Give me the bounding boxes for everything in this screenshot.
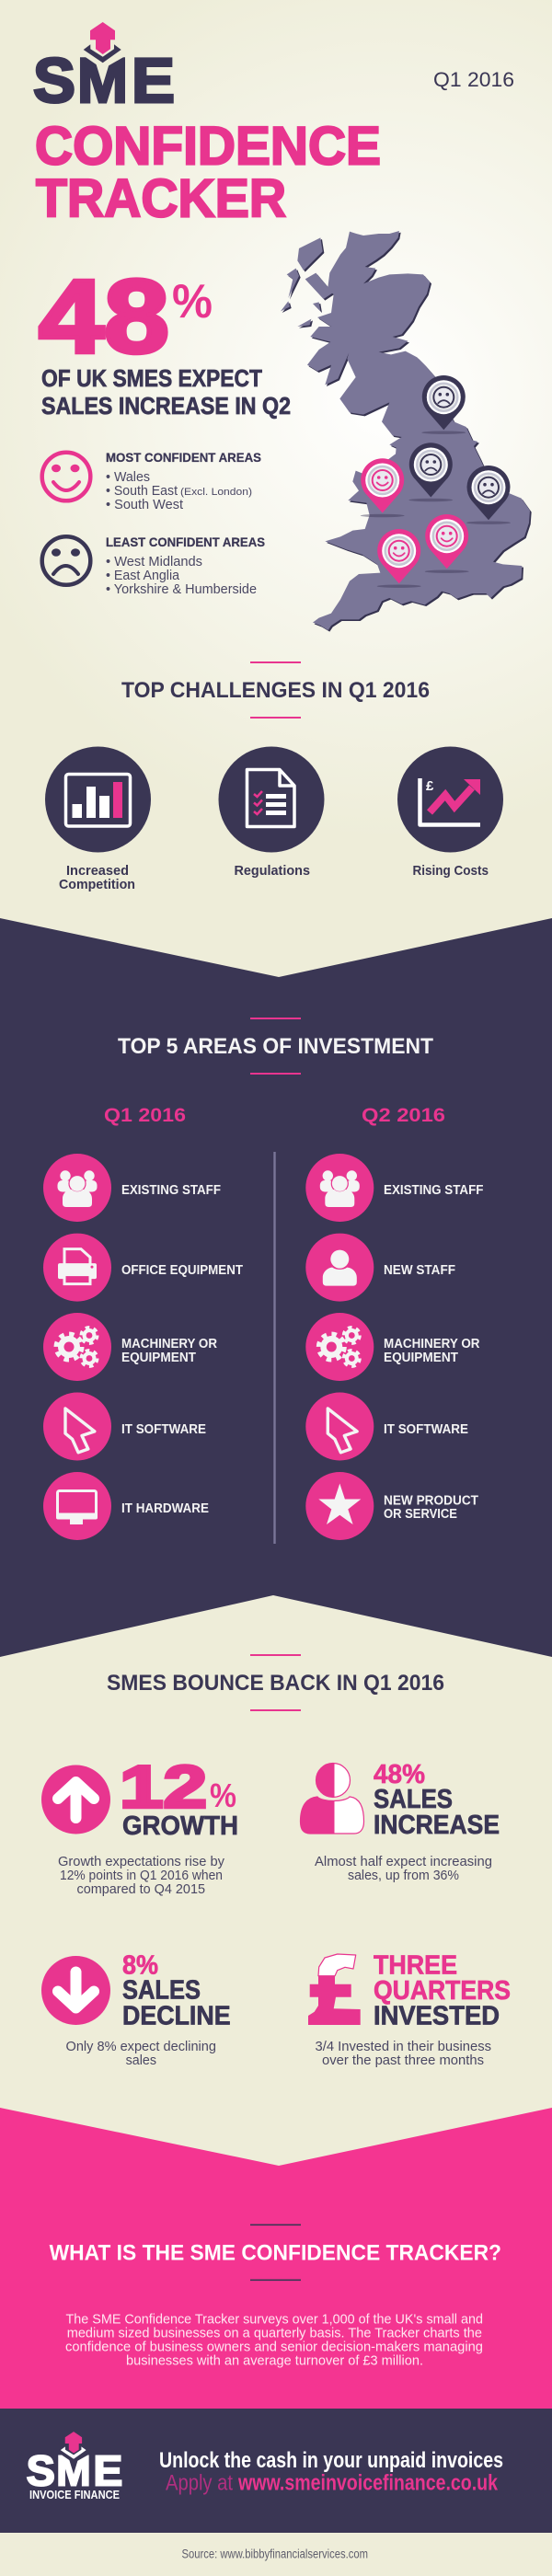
pin: Wales (most confident) bbox=[361, 458, 405, 517]
icon: up arrow bbox=[41, 1765, 110, 1834]
stat: three quarters invested: THREE bbox=[374, 1951, 457, 1981]
panel: footer bbox=[0, 2409, 552, 2533]
item: new product or service: NEW PRODUCT bbox=[384, 1494, 478, 1509]
heading: top 5 areas of investment: TOP 5 AREAS OF INVESTMENT bbox=[118, 1034, 433, 1059]
item: new product or service: OR SERVICE bbox=[384, 1507, 457, 1522]
pin: South West (most confident) bbox=[377, 529, 421, 588]
stat: 12% growth: 12 bbox=[120, 1754, 207, 1820]
challenge: increased competition bbox=[45, 747, 151, 892]
icon: down arrow bbox=[41, 1956, 110, 2025]
challenge: rising costs bbox=[397, 747, 503, 879]
item: existing staff bbox=[43, 1154, 221, 1222]
item: new staff: NEW STAFF bbox=[384, 1263, 455, 1278]
title: TRACKER bbox=[36, 169, 286, 228]
stat: three quarters invested: QUARTERS bbox=[374, 1976, 511, 2006]
tracker description bbox=[65, 2312, 483, 2369]
headline statistic 48%: 48 bbox=[39, 259, 169, 374]
heading: what is the SME confidence tracker: WHAT IS THE SME CONFIDENCE TRACKER? bbox=[50, 2241, 501, 2266]
heading: SMEs bounce back: SMES BOUNCE BACK IN Q1 2016 bbox=[107, 1671, 444, 1696]
most confident areas: • Wales bbox=[106, 470, 150, 485]
SME logo bbox=[33, 22, 175, 116]
pin: Yorkshire and Humberside (least confident) bbox=[408, 443, 453, 501]
item: office equipment bbox=[43, 1234, 243, 1302]
item: existing staff: EXISTING STAFF bbox=[121, 1183, 221, 1198]
stat: 12% growth: GROWTH bbox=[122, 1811, 238, 1841]
least confident areas: LEAST CONFIDENT AREAS bbox=[106, 535, 265, 549]
item: machinery or equipment: MACHINERY OR bbox=[384, 1337, 480, 1351]
most confident areas: MOST CONFIDENT AREAS bbox=[106, 450, 261, 465]
stat: 48% sales increase: INCREASE bbox=[374, 1811, 500, 1840]
stat: 8% sales decline: 8% bbox=[122, 1951, 158, 1981]
date label: Q1 2016 bbox=[433, 68, 514, 91]
Q1 list bbox=[43, 1154, 243, 1540]
item: new staff bbox=[305, 1234, 455, 1302]
Q2 list bbox=[305, 1154, 484, 1540]
item: machinery or equipment: EQUIPMENT bbox=[121, 1351, 196, 1365]
stat: 8% sales decline: Only 8% expect declining bbox=[66, 2039, 216, 2054]
item: IT software: IT SOFTWARE bbox=[121, 1422, 206, 1437]
item: IT software: IT SOFTWARE bbox=[384, 1422, 468, 1437]
stat: three quarters invested: over the past three months bbox=[322, 2053, 484, 2068]
header background glow bbox=[0, 0, 552, 980]
stat: three quarters invested bbox=[308, 1951, 511, 2068]
tracker description: businesses with an average turnover of £3 million. bbox=[126, 2353, 423, 2369]
footer logo bbox=[27, 2432, 122, 2501]
least confident areas: • East Anglia bbox=[106, 569, 180, 583]
item: new product or service bbox=[305, 1472, 478, 1540]
stat: 12% growth: 12% points in Q1 2016 when bbox=[60, 1868, 223, 1883]
item: existing staff: EXISTING STAFF bbox=[384, 1183, 484, 1198]
stat: 12% growth: Growth expectations rise by bbox=[58, 1854, 224, 1869]
UK map with pins bbox=[281, 231, 532, 632]
stat: 48% sales increase bbox=[300, 1760, 500, 1883]
stat: 48% sales increase: SALES bbox=[374, 1785, 453, 1814]
least confident areas bbox=[106, 535, 265, 597]
footer logo: INVOICE FINANCE bbox=[29, 2489, 120, 2501]
stat: 48% sales increase: 48% bbox=[374, 1760, 425, 1789]
source line: Source: www.bibbyfinancialservices.com bbox=[182, 2547, 368, 2561]
panel: what is the tracker background bbox=[0, 2108, 552, 2409]
SME logo: E bbox=[132, 45, 175, 116]
title bbox=[35, 116, 381, 228]
column heading: Q1 2016: Q1 2016 bbox=[104, 1105, 186, 1126]
headline statistic 48% bbox=[39, 259, 213, 374]
footer call to action: Apply at bbox=[166, 2471, 233, 2496]
least confident areas: • Yorkshire & Humberside bbox=[106, 582, 257, 597]
panel: investment background bbox=[0, 918, 552, 1657]
headline statistic 48%: % bbox=[172, 275, 213, 328]
SME logo: S bbox=[33, 45, 75, 116]
tracker description: The SME Confidence Tracker surveys over 1,000 of the UK's small and bbox=[66, 2312, 483, 2328]
footer logo: S bbox=[27, 2447, 55, 2494]
most confident areas bbox=[106, 450, 261, 512]
item: IT hardware bbox=[43, 1472, 209, 1540]
stat: 8% sales decline: SALES bbox=[122, 1976, 201, 2006]
icon: pound sign three quarters filled bbox=[308, 1954, 361, 2025]
headline statistic text: OF UK SMES EXPECT bbox=[41, 366, 262, 392]
item: IT software bbox=[305, 1393, 468, 1461]
stat: 12% growth: compared to Q4 2015 bbox=[77, 1881, 205, 1897]
challenge: rising costs: £ bbox=[426, 778, 434, 794]
icon: happy face bbox=[42, 453, 90, 500]
stat: 8% sales decline: DECLINE bbox=[122, 2002, 231, 2031]
item: IT hardware: IT HARDWARE bbox=[121, 1501, 209, 1516]
pin: North East (least confident) bbox=[421, 375, 466, 434]
stat: three quarters invested: INVESTED bbox=[374, 2002, 500, 2031]
least confident areas: • West Midlands bbox=[106, 555, 202, 569]
tracker description: medium sized businesses on a quarterly basis. The Tracker charts the bbox=[67, 2326, 482, 2341]
title: CONFIDENCE bbox=[35, 116, 381, 177]
item: machinery or equipment: MACHINERY OR bbox=[121, 1337, 217, 1351]
challenge: regulations bbox=[219, 747, 324, 879]
tracker description: confidence of business owners and senior decision-makers managing bbox=[65, 2340, 483, 2355]
footer call to action bbox=[159, 2448, 503, 2496]
most confident areas: (Excl. London) bbox=[180, 487, 252, 498]
footer call to action: www.smeinvoicefinance.co.uk bbox=[237, 2471, 499, 2496]
headline statistic text bbox=[41, 366, 291, 420]
icon: sad face bbox=[42, 536, 90, 585]
stat: 48% sales increase: sales, up from 36% bbox=[348, 1868, 459, 1883]
column heading: Q2 2016: Q2 2016 bbox=[362, 1105, 445, 1126]
most confident areas: • South West bbox=[106, 498, 183, 512]
headline statistic text: SALES INCREASE IN Q2 bbox=[41, 394, 291, 420]
stat: 12% growth bbox=[41, 1754, 238, 1897]
footer logo: M bbox=[56, 2447, 91, 2494]
stat: three quarters invested: 3/4 Invested in their business bbox=[315, 2039, 491, 2054]
challenge: increased competition: Increased bbox=[66, 863, 129, 879]
challenge: increased competition: Competition bbox=[59, 877, 135, 892]
item: machinery or equipment bbox=[305, 1313, 480, 1381]
pin: East Anglia (least confident) bbox=[466, 466, 511, 524]
SME logo: M bbox=[77, 45, 128, 116]
icon: half-filled person bbox=[300, 1763, 364, 1834]
challenge: rising costs: Rising Costs bbox=[412, 863, 489, 879]
most confident areas: • South East bbox=[106, 484, 178, 499]
stat: 12% growth: % bbox=[210, 1777, 236, 1814]
stat: 48% sales increase: Almost half expect increasing bbox=[315, 1854, 492, 1869]
item: IT software bbox=[43, 1393, 206, 1461]
item: office equipment: OFFICE EQUIPMENT bbox=[121, 1263, 243, 1278]
stat: 8% sales decline bbox=[41, 1951, 231, 2068]
item: existing staff bbox=[305, 1154, 484, 1222]
stat: 8% sales decline: sales bbox=[126, 2053, 156, 2068]
challenge: regulations: Regulations bbox=[234, 863, 310, 879]
footer logo: E bbox=[93, 2447, 122, 2494]
item: machinery or equipment bbox=[43, 1313, 217, 1381]
item: machinery or equipment: EQUIPMENT bbox=[384, 1351, 458, 1365]
pin: South East (most confident) bbox=[425, 514, 469, 573]
heading: top challenges: TOP CHALLENGES IN Q1 2016 bbox=[121, 678, 430, 703]
